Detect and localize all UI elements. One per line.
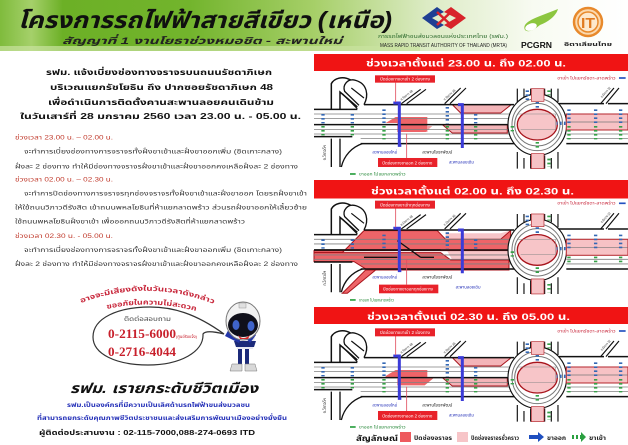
logo: Italian-Thai bbox=[564, 8, 613, 48]
diagram labels: ถ.วิภาวดีฯ bbox=[321, 271, 327, 286]
diagram labels bbox=[321, 74, 626, 176]
diagram: period 2 bbox=[314, 200, 628, 302]
diagram labels: สะพานลอยเดิม bbox=[449, 412, 474, 417]
announcement heading: รฟม. แจ้งเบี่ยงช่องทางจราจรบนถนนรัชดาภิเษก bbox=[46, 66, 272, 77]
period 2: จะทำการปิดช่องทางการจราจรทุกช่องจราจรทั้งฝั่งขาเข้าและฝั่งขาออก โดยรถฝั่งขาเข้า bbox=[24, 189, 307, 198]
diagram labels: ซ.รัชดาฯ 48 bbox=[399, 342, 414, 354]
diagram labels: สะพานลอยเดิม bbox=[449, 159, 474, 164]
labels: all lanes closed: ปิดช่องทางขาออกทุกช่องทาง bbox=[383, 286, 434, 293]
mission statement bbox=[37, 400, 287, 423]
period 3 bbox=[15, 231, 299, 268]
announcement heading: เพื่อดำเนินการติดตั้งคานสะพานลอยคนเดินข้าม bbox=[48, 96, 274, 107]
legend: ขาเข้า bbox=[589, 435, 606, 442]
announcement heading: ในวันเสาร์ที่ 28 มกราคม 2560 เวลา 23.00 น. - 05.00 น. bbox=[20, 110, 301, 121]
mission statement: รฟม.เป็นองค์กรที่มีความเป็นเลิศด้านรถไฟฟ้าขนส่งมวลชน bbox=[67, 400, 250, 409]
slogan: รฟม. เรายกระดับชีวิตเมือง bbox=[70, 380, 259, 396]
diagram labels: สะพานโยธาพัฒน์ bbox=[422, 148, 453, 154]
diagram labels: ขาออก ไปแยกลาดพร้าว bbox=[359, 170, 406, 176]
icon: mascot bbox=[225, 302, 260, 371]
diagram labels: ซ.รัชดาฯ 36 bbox=[443, 341, 457, 354]
diagram: period 1 bbox=[314, 74, 628, 176]
speech bubble: contact bbox=[93, 307, 224, 365]
speech bubble: contact: 0-2716-4044 bbox=[108, 344, 176, 359]
speech bubble: contact: (ศูนย์รับแจ้ง) bbox=[176, 334, 198, 339]
diagram labels: ซ.รัชดาฯ 36 bbox=[443, 88, 457, 101]
diagram labels: ซ.รัชดาฯ 32 bbox=[600, 211, 612, 224]
diagram labels: ซ.รัชดาฯ 32 bbox=[600, 86, 612, 99]
apology curved text: ขออภัยในความไม่สะดวก bbox=[106, 298, 196, 311]
period 2: ช่วงเวลา 02.00 น. – 02.30 น. bbox=[15, 175, 113, 184]
logo: Italian-Thai: อิตาเลียนไทย bbox=[564, 41, 613, 48]
labels: closed lanes bbox=[375, 75, 437, 167]
legend: สัญลักษณ์ bbox=[356, 433, 398, 443]
diagram labels: สะพานโยธาพัฒน์ bbox=[422, 401, 453, 407]
heading bar: period 3: ช่วงเวลาตั้งแต่ 02.30 น. ถึง 05.00 น. bbox=[367, 310, 570, 323]
heading bar: period 1 bbox=[314, 54, 628, 71]
subtitle: สัญญาที่ 1 งานโยธาช่วงหมอชิต - สะพานใหม่ bbox=[62, 34, 345, 47]
period 2: ให้ใช้ถนนวิภาวดีรังสิต เข้าถนนพหลโยธินที่ห้าแยกลาดพร้าว ส่วนรถฝั่งขาออกให้เลี้ยวซ้าย bbox=[15, 202, 307, 212]
logo: PCGRN bbox=[521, 9, 558, 50]
heading bar: period 2 bbox=[314, 180, 628, 198]
legend bbox=[356, 432, 606, 443]
announcement heading: บริเวณแยกรัชโยธิน ถึง ปากซอยรัชดาภิเษก 48 bbox=[50, 82, 274, 92]
logo: MRTA: MASS RAPID TRANSIT AUTHORITY OF THAILAND (MRTA) bbox=[380, 43, 507, 49]
period 3: ช่วงเวลา 02.30 น. - 05.00 น. bbox=[15, 231, 113, 240]
legend: ขาออก bbox=[547, 436, 566, 442]
diagram labels: สะพานลอยใหม่ bbox=[372, 274, 398, 280]
diagram labels: สะพานลอยใหม่ bbox=[372, 401, 398, 407]
period 2: ใช้ถนนพหลโยธินฝั่งขาเข้า เพื่อออกถนนวิภาวดีรังสิตที่ห้าแยกลาดพร้าว bbox=[15, 216, 245, 226]
legend: ปิดช่องจราจรชั่วคราว bbox=[471, 433, 519, 442]
period 3: จะทำการเบี่ยงช่องทางการจราจรทั้งฝั่งขาเข้าและฝั่งขาออกเพิ่ม (ชิดเกาะกลาง) bbox=[24, 245, 282, 254]
diagram labels: สะพานลอยใหม่ bbox=[372, 148, 398, 154]
announcement heading bbox=[20, 66, 301, 121]
diagram labels: ขาออก ไปแยกลาดพร้าว bbox=[359, 423, 406, 429]
logo: MRTA bbox=[378, 7, 508, 49]
period 1: จะทำการเบี่ยงช่องทางการจราจรทั้งฝั่งขาเข้าและฝั่งขาออกเพิ่ม (ชิดเกาะกลาง) bbox=[24, 146, 282, 156]
labels: closed lanes bbox=[375, 328, 437, 420]
heading bar: period 3 bbox=[314, 307, 628, 324]
labels: closed lanes: ปิดช่องทางขาเข้า 2 ช่องทาง bbox=[380, 76, 431, 82]
period 1: ฝั่งละ 2 ช่องทาง ทำให้มีช่องทางจราจรฝั่งขาเข้าและฝั่งขาออกคงเหลือฝั่งละ 2 ช่องทาง bbox=[15, 162, 299, 170]
schedule text block bbox=[15, 133, 307, 268]
diagram labels: สะพานลอยเดิม bbox=[456, 285, 481, 290]
heading bar: period 1: ช่วงเวลาตั้งแต่ 23.00 น. ถึง 02.00 น. bbox=[366, 57, 566, 70]
diagram labels: ขาออก ไปแยกลาดพร้าว bbox=[359, 296, 394, 302]
mission statement: ที่สามารถยกระดับคุณภาพชีวิตประชาชนและส่งเสริมการพัฒนาเมืองอย่างยั่งยืน bbox=[37, 413, 287, 423]
diagram labels bbox=[321, 200, 626, 302]
labels: all lanes closed bbox=[375, 201, 438, 293]
legend: ปิดช่องจราจร bbox=[414, 434, 452, 442]
diagram labels: ถ.วิภาวดีฯ bbox=[321, 398, 327, 413]
diagram labels: ขาเข้า ไปแยกรัชดา-ลาดพร้าว bbox=[557, 327, 616, 333]
diagram labels bbox=[321, 327, 626, 429]
speech bubble: contact: 0-2115-6000 bbox=[108, 326, 176, 341]
period 3: ฝั่งละ 2 ช่องทาง ทำให้มีช่องทางจราจรฝั่งขาเข้าและฝั่งขาออกคงเหลือฝั่งละ 2 ช่องทาง bbox=[15, 259, 299, 268]
diagram labels: ซ.รัชดาฯ 48 bbox=[399, 89, 414, 101]
heading bar: period 2: ช่วงเวลาตั้งแต่ 02.00 น. ถึง 02.30 น. bbox=[371, 185, 574, 198]
labels: closed lanes: ปิดช่องทางขาออก 2 ช่องทาง bbox=[382, 412, 433, 418]
diagram labels: ขาเข้า ไปแยกรัชดา-ลาดพร้าว bbox=[557, 74, 616, 80]
logo: PCGRN: PCGRN bbox=[521, 41, 552, 50]
logo: Italian-Thai: IT bbox=[581, 15, 595, 32]
period 2 bbox=[15, 175, 307, 226]
apology curved text: อาจจะมีเสียงดังในวันเวลาดังกล่าว bbox=[80, 284, 214, 304]
diagram labels: สะพานโยธาพัฒน์ bbox=[422, 274, 453, 280]
coordinator contact: ผู้ติดต่อประสานงาน : 02-115-7000,088-274-0693 ITD bbox=[39, 429, 255, 437]
labels: closed lanes: ปิดช่องทางขาออก 2 ช่องทาง bbox=[382, 159, 433, 165]
diagram labels: ซ.รัชดาฯ 36 bbox=[443, 214, 457, 227]
title: โครงการรถไฟฟ้าสายสีเขียว (เหนือ) bbox=[18, 7, 392, 33]
header banner bbox=[0, 0, 628, 51]
logo: MRTA: การรถไฟฟ้าขนส่งมวลชนแห่งประเทศไทย (รฟม.) bbox=[378, 33, 508, 40]
diagram labels: ซ.รัชดาฯ 48 bbox=[399, 214, 414, 227]
labels: closed lanes: ปิดช่องทางขาเข้า 2 ช่องทาง bbox=[380, 329, 431, 335]
diagram labels: ถ.วิภาวดีฯ bbox=[321, 145, 327, 160]
speech bubble: contact: ติดต่อสอบถาม bbox=[124, 316, 171, 323]
diagram labels: ขาเข้า ไปแยกรัชดา-ลาดพร้าว bbox=[557, 200, 616, 206]
labels: all lanes closed: ปิดช่องทางขาเข้าทุกช่องทาง bbox=[380, 201, 431, 208]
period 1 bbox=[15, 133, 299, 170]
period 1: ช่วงเวลา 23.00 น. – 02.00 น. bbox=[15, 133, 113, 142]
diagram: period 3 bbox=[314, 327, 628, 429]
diagram labels: ซ.รัชดาฯ 32 bbox=[600, 339, 612, 352]
